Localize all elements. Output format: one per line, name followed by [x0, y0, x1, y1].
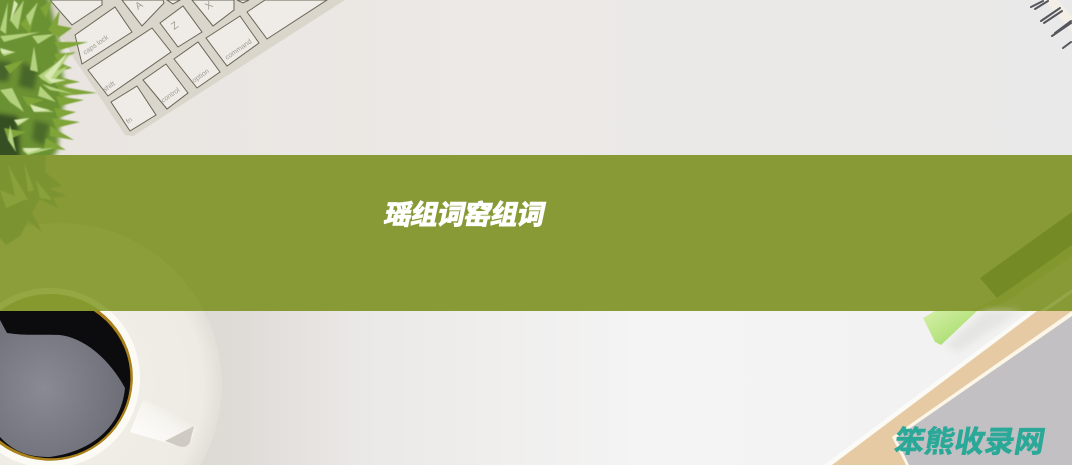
keyboard: option — [191, 68, 211, 85]
coffee cup handle — [130, 400, 198, 447]
saucer — [0, 311, 222, 465]
keyboard: caps lock — [82, 34, 110, 57]
band overlay: cup rim — [0, 288, 110, 311]
band overlay: saucer — [0, 223, 204, 311]
band overlay: highlighter pen — [980, 212, 1072, 298]
notebook paper corner — [824, 311, 1072, 465]
keyboard: X — [203, 0, 215, 12]
title: 瑶组词窑组词 — [382, 199, 548, 230]
band overlay: plant shadow — [0, 150, 66, 245]
green band — [0, 150, 1072, 311]
keyboard: command — [224, 38, 253, 62]
watermark: 笨熊收录网 — [892, 425, 1048, 459]
plant — [0, 0, 97, 155]
keyboard: fn — [125, 116, 134, 126]
keyboard: control — [160, 87, 182, 105]
keyboard: shift — [102, 81, 117, 94]
spiral notebook — [1031, 0, 1072, 48]
keyboard: A — [133, 0, 145, 12]
keyboard: Z — [169, 20, 181, 32]
coffee cup — [0, 311, 140, 465]
highlighter pen tip — [923, 311, 1020, 352]
keyboard — [40, 0, 345, 136]
